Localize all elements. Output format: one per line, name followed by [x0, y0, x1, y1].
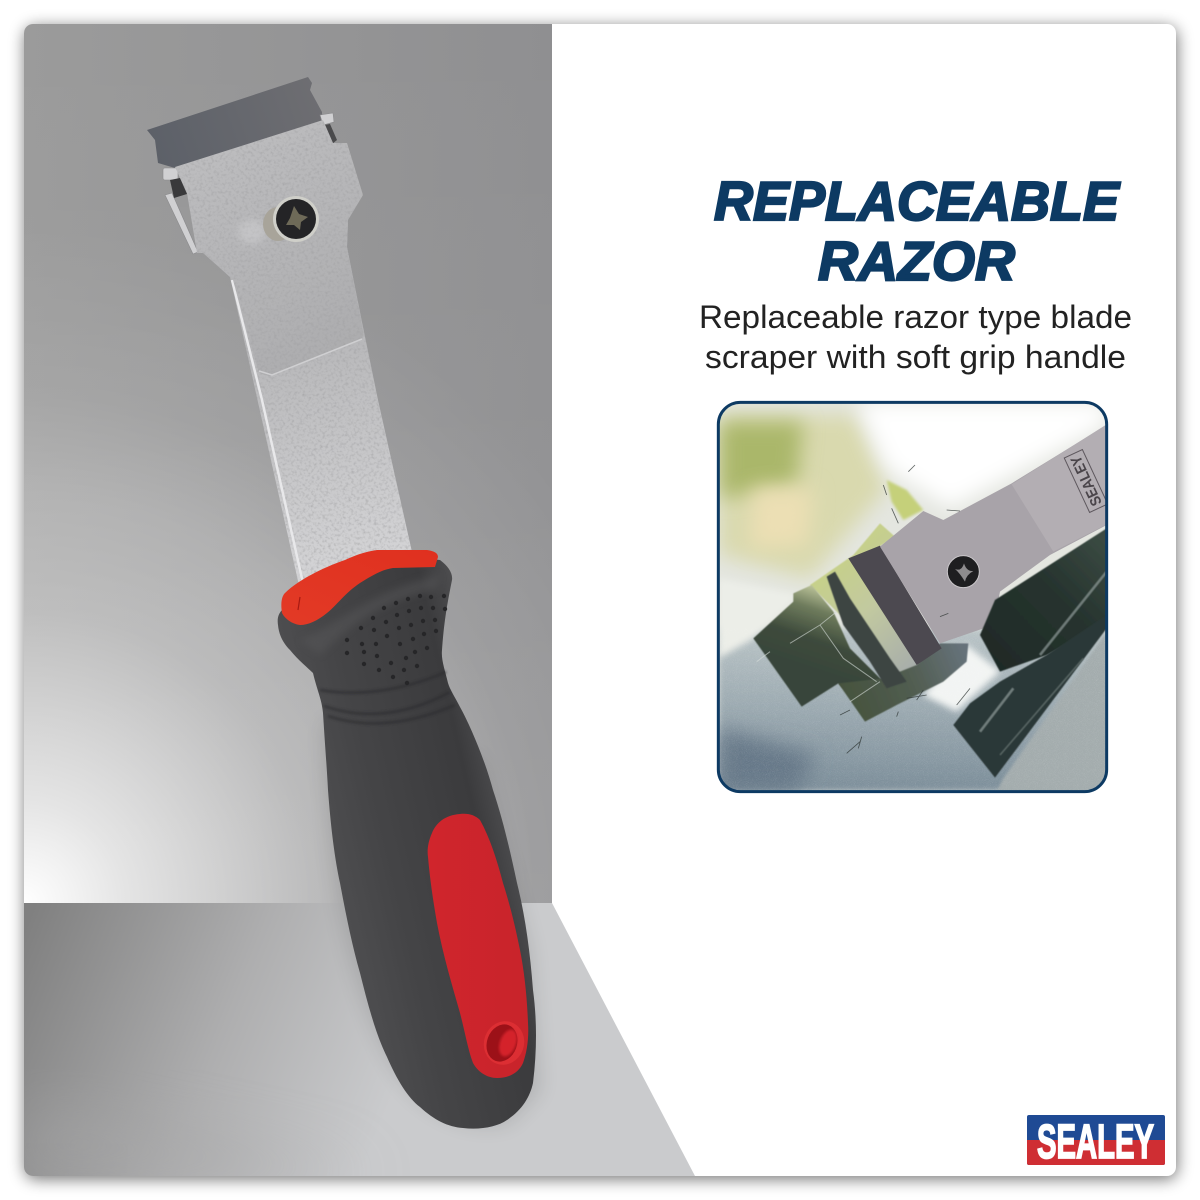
handle body: [278, 555, 536, 1129]
product: razor scraper: [147, 77, 540, 1129]
handle shadow: [325, 720, 540, 1125]
red handle insert: [428, 814, 528, 1078]
handle ridges: [320, 672, 455, 723]
plate bottom edge: [259, 339, 362, 375]
screw glint: [238, 220, 266, 244]
scraper plate in photo: [880, 425, 1107, 643]
lower paint block: [838, 643, 968, 722]
collar slot: [298, 597, 300, 610]
panel: product photo backdrop: [24, 24, 695, 1176]
description: scraper with soft grip handle: [705, 339, 1126, 375]
razor blade: [147, 77, 322, 168]
SEALEY stamp: SEALEY: [1068, 453, 1106, 508]
debris: [840, 465, 970, 753]
clear glass stripe: [810, 523, 916, 672]
hanging hole: [478, 1015, 530, 1071]
holder plate: [175, 120, 363, 375]
reflection highlights: [980, 572, 1107, 755]
description: Replaceable razor type blade: [699, 299, 1132, 335]
title: [714, 170, 1121, 292]
window reflection: [980, 528, 1107, 672]
scraper shank in photo: [1012, 424, 1107, 552]
title: REPLACEABLE: [714, 170, 1121, 232]
blade clips: [163, 113, 337, 254]
grip dots: [345, 594, 447, 685]
blade in photo: [848, 546, 942, 665]
scratched paint edge: [827, 572, 907, 688]
description: [699, 299, 1132, 375]
scraped paint block: [753, 585, 883, 707]
inset photo: blade scraping paint from glass: [718, 402, 1108, 792]
thumb rest highlight: [300, 575, 440, 655]
inset frame: [718, 402, 1107, 792]
screw in photo: [947, 556, 979, 588]
screw: [263, 196, 319, 242]
metal shank: [203, 220, 412, 595]
dark lower reflection: [953, 615, 1107, 778]
shank highlight edge: [232, 280, 305, 592]
title: RAZOR: [818, 230, 1015, 292]
red collar: [281, 550, 438, 625]
